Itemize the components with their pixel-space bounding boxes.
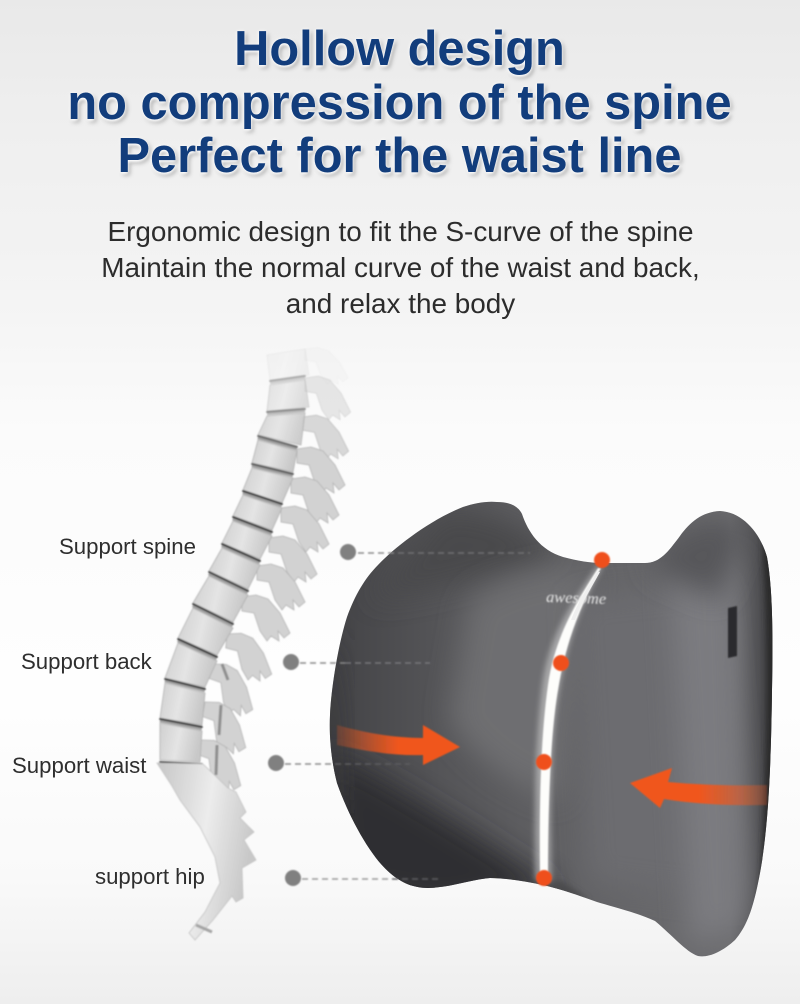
arrow: left pressure: [337, 725, 460, 765]
description text: and relax the body: [286, 288, 515, 319]
lumbar cushion: [325, 502, 785, 956]
seam over brand: [571, 572, 600, 620]
spinous processes: [192, 347, 351, 794]
grey marker: waist: [268, 755, 284, 771]
title: [67, 22, 734, 183]
title: no compression of the spine: [67, 76, 732, 130]
brand tag: [728, 606, 737, 658]
grey marker: back: [283, 654, 299, 670]
title: Hollow design: [234, 22, 565, 76]
illustration artwork: [156, 349, 772, 956]
leader lines: [285, 553, 530, 879]
vertebral bodies: [160, 349, 309, 762]
label: support waist: Support waist: [12, 753, 146, 778]
orange marker: upper middle: [553, 655, 569, 671]
title: Perfect for the waist line: [117, 129, 682, 183]
cushion centre seam: [535, 566, 603, 880]
spine illustration: [157, 347, 351, 940]
label: support hip: support hip: [95, 864, 205, 889]
orange marker: bottom: [536, 870, 552, 886]
cushion shading: [325, 510, 785, 945]
grey marker: hip: [285, 870, 301, 886]
intervertebral discs: [160, 377, 305, 728]
orange marker: lower middle: [536, 754, 552, 770]
sacrum: [157, 763, 256, 940]
description text: Maintain the normal curve of the waist and back,: [101, 252, 700, 283]
arrow: right pressure: [630, 768, 767, 808]
grey marker: spine: [340, 544, 356, 560]
description text: Ergonomic design to fit the S-curve of the spine: [107, 216, 694, 247]
orange marker: top: [594, 552, 610, 568]
description text: [101, 216, 700, 319]
label: support spine: Support spine: [59, 534, 196, 559]
label: support back: Support back: [21, 649, 152, 674]
brand name: awesome: [546, 589, 607, 608]
